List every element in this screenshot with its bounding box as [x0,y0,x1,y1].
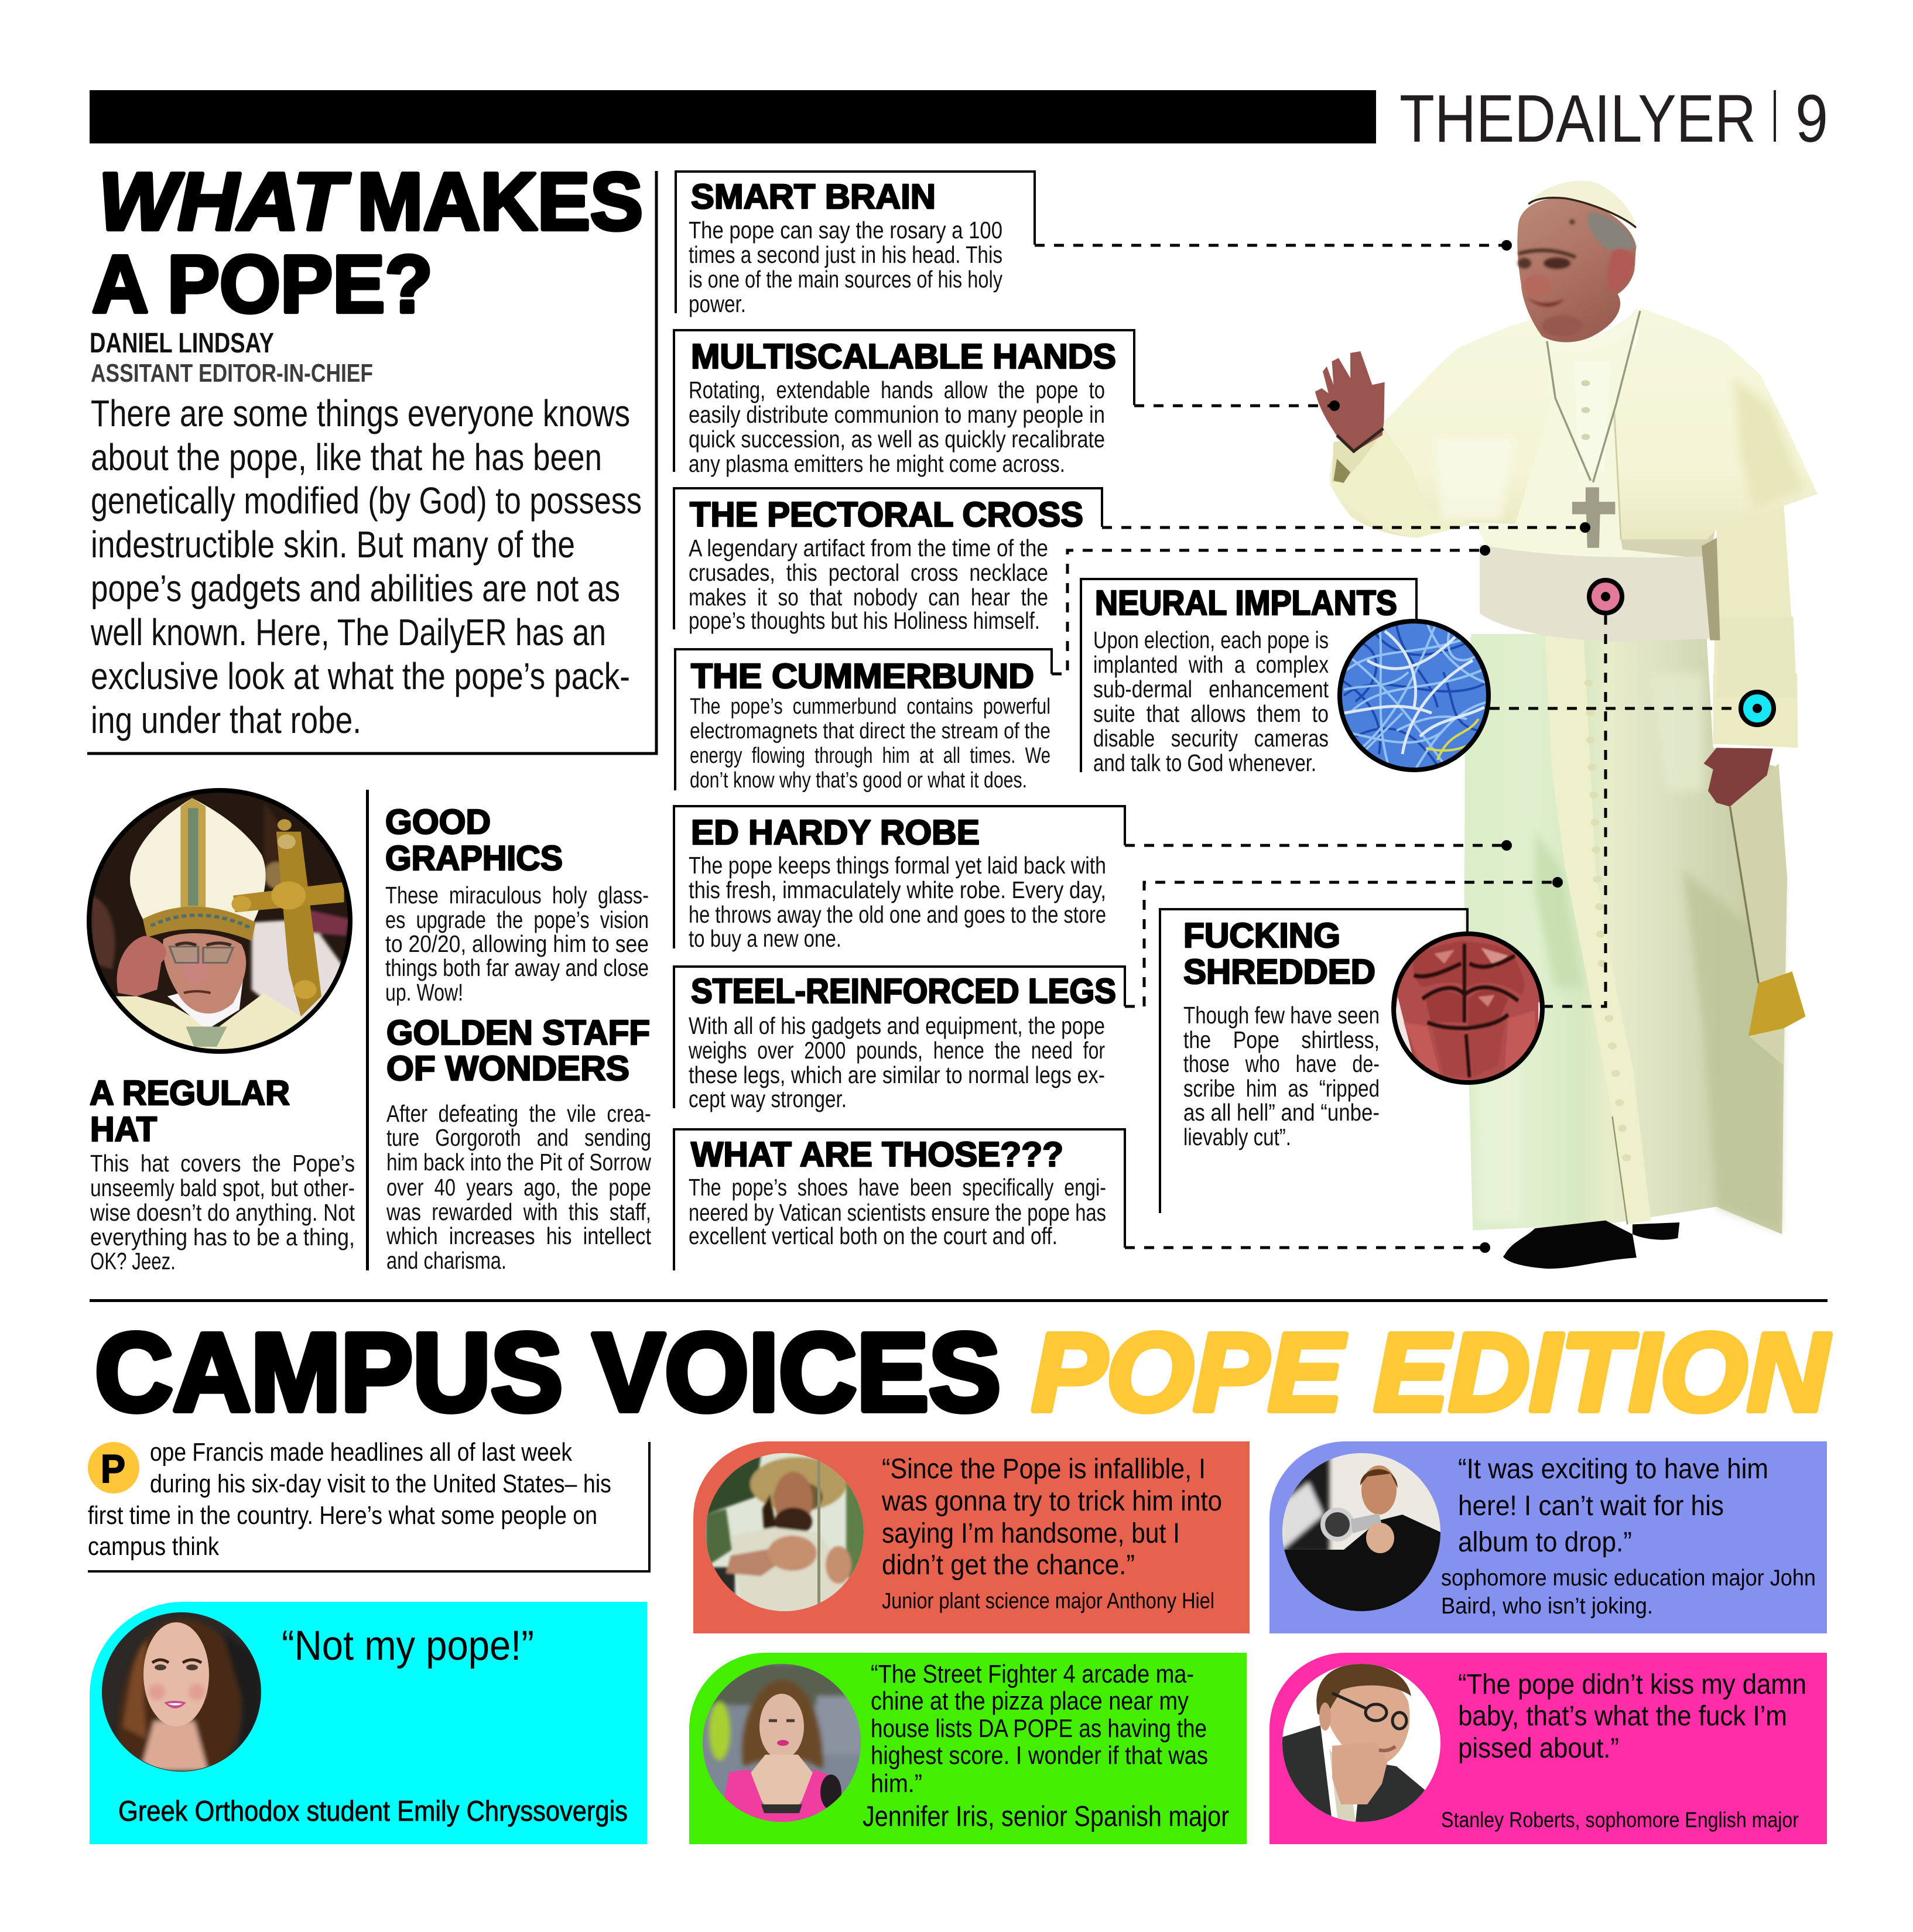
sidebar: a regular hat: This hat covers the Pope’s [90,1150,355,1177]
sidebar: a regular hat: HAT [90,1110,157,1149]
quote card: anthony: Junior plant science major Anthony Hiel [882,1589,1214,1614]
quote card: john [1269,1441,1827,1633]
campus voices heading [95,1311,1830,1434]
panel: fucking shredded: lievably cut”. [1183,1123,1291,1150]
sidebar: a regular hat [90,1074,355,1275]
panel: what are those: WHAT ARE THOSE??? [691,1135,1063,1174]
sidebar: good graphics [385,803,649,1006]
icon: pink target marker [1589,580,1622,613]
quote card: jennifer: him.” [871,1769,922,1798]
masthead: THEDAILYER [1399,81,1756,156]
intro paragraph [90,392,642,741]
panel: what are those [674,1129,1125,1270]
quote card: stanley: pissed about.” [1458,1733,1619,1764]
quote card: jennifer: house lists DA POPE as having the [871,1714,1207,1743]
intro paragraph: genetically modified (by God) to possess [91,479,642,522]
panel: fucking shredded [1160,909,1467,1213]
panel: fucking shredded: the Pope shirtless, [1183,1026,1380,1053]
panel: the cummerbund [675,649,1052,793]
panel: multiscalable hands: Rotating, extendable hands allow the pope to [689,376,1105,403]
quote card: john: Baird, who isn’t joking. [1441,1594,1653,1619]
intro paragraph: well known. Here, The DailyER has an [90,611,606,653]
panel: neural implants: NEURAL IMPLANTS [1095,584,1397,622]
sidebar: good graphics: es upgrade the pope’s vision [385,906,649,933]
panel: neural implants: Upon election, each pope is [1093,626,1329,653]
sidebar: a regular hat: everything has to be a thing, [90,1224,355,1251]
campus voices intro: first time in the country. Here’s what some people on [88,1501,597,1530]
quote card: stanley [1269,1653,1827,1844]
sidebar: golden staff: which increases his intellect [386,1222,652,1249]
quote card: stanley: “The pope didn’t kiss my damn [1458,1669,1806,1700]
sidebar: golden staff: GOLDEN STAFF [386,1013,650,1052]
sidebar: a regular hat: OK? Jeez. [90,1248,176,1275]
panel: what are those: excellent vertical both on the court and off. [689,1222,1058,1249]
sidebar: golden staff: After defeating the vile crea- [386,1100,651,1127]
intro paragraph: There are some things everyone knows [91,392,630,434]
title: MAKES [357,156,643,247]
byline: ASSITANT EDITOR-IN-CHIEF [91,359,373,388]
panel: smart brain: SMART BRAIN [691,177,936,216]
quote card: jennifer: chine at the pizza place near my [871,1687,1189,1715]
quote card: emily [90,1602,647,1844]
panel: neural implants: and talk to God whenever. [1093,749,1316,776]
photo: abs [1392,932,1544,1084]
quote card: jennifer: highest score. I wonder if that was [871,1741,1208,1770]
callout connectors [1035,240,1757,1253]
panel: multiscalable hands: any plasma emitters he might come across. [689,450,1065,477]
panel: fucking shredded: FUCKING [1183,916,1340,955]
panel: neural implants: sub-dermal enhancement [1093,676,1329,703]
intro paragraph: pope’s gadgets and abilities are not as [91,567,620,609]
panel: neural implants [1081,579,1416,776]
intro paragraph: ing under that robe. [91,699,361,741]
panel: smart brain: The pope can say the rosary a 100 [689,217,1002,244]
panel: ed hardy robe: The pope keeps things formal yet laid back with [689,852,1106,879]
photo: pope with mitre and staff [83,785,358,1057]
panel: steel-reinforced legs: these legs, which are similar to normal legs ex- [689,1061,1105,1088]
panel: the cummerbund: The pope’s cummerbund contains powerful [690,694,1050,719]
sidebar: a regular hat: wise doesn’t do anything. Not [90,1199,355,1226]
panel: the cummerbund: electromagnets that direct the stream of the [690,719,1050,744]
panel: the cummerbund: don’t know why that’s good or what it does. [690,768,1027,793]
panel: the pectoral cross [674,488,1102,634]
panel: ed hardy robe: to buy a new one. [689,925,841,952]
panel: the pectoral cross: makes it so that nobody can hear the [689,584,1048,611]
sidebar: golden staff: ture Gorgoroth and sending [386,1124,651,1151]
sidebar: good graphics: things both far away and close [385,954,649,981]
panel: steel-reinforced legs: weighs over 2000 pounds, hence the need for [688,1037,1105,1064]
byline: DANIEL LINDSAY [90,328,274,359]
sidebar: good graphics: These miraculous holy glass- [385,882,649,909]
sidebar: good graphics: up. Wow! [385,979,463,1006]
panel: fucking shredded: scribe him as “ripped [1183,1075,1380,1102]
campus voices heading: CAMPUS VOICES [95,1311,1001,1434]
panel: fucking shredded: those who have de- [1183,1050,1380,1077]
panel: steel-reinforced legs: With all of his gadgets and equipment, the pope [689,1012,1105,1039]
panel: multiscalable hands: quick succession, as well as quickly recalibrate [689,426,1105,453]
panel: fucking shredded: as all hell” and “unbe- [1183,1099,1380,1126]
sidebar: golden staff: OF WONDERS [386,1049,629,1088]
panel: ed hardy robe: ED HARDY ROBE [691,813,980,852]
sidebar: golden staff: over 40 years ago, the pope [386,1174,651,1201]
sidebar: golden staff: him back into the Pit of Sorrow [386,1149,651,1176]
pope figure [1315,181,1818,1269]
quote card: emily: Greek Orthodox student Emily Chryssovergis [118,1796,628,1827]
title: WHAT [98,156,350,247]
masthead: 9 [1795,81,1828,156]
intro paragraph: indestructible skin. But many of the [91,523,575,566]
panel: smart brain: power. [689,290,746,317]
panel: multiscalable hands [674,330,1134,477]
sidebar: a regular hat: unseemly bald spot, but other- [90,1174,355,1201]
panel: fucking shredded: SHREDDED [1183,953,1375,991]
panel: smart brain: is one of the main sources of his holy [689,266,1002,293]
quote card: anthony [693,1441,1250,1633]
panel: steel-reinforced legs: cept way stronger. [689,1085,847,1112]
icon: cyan target marker [1741,692,1774,725]
campus voices intro: P [101,1447,125,1491]
panel: smart brain: times a second just in his head. This [689,241,1002,268]
campus voices heading: POPE EDITION [1032,1311,1830,1434]
panel: neural implants: suite that allows them to [1093,700,1329,727]
quote card: emily: “Not my pope!” [282,1623,534,1669]
panel: the cummerbund: THE CUMMERBUND [691,657,1034,696]
sidebar: a regular hat: A REGULAR [90,1074,290,1112]
panel: the cummerbund: energy flowing through him at all times. We [690,744,1050,768]
panel: smart brain [676,172,1035,317]
panel: the pectoral cross: A legendary artifact from the time of the [689,535,1048,561]
section rule [90,1299,1828,1302]
quote card: john: “It was exciting to have him [1458,1454,1768,1485]
panel: ed hardy robe: this fresh, immaculately white robe. Every day, [689,876,1106,903]
sidebar: good graphics: GRAPHICS [385,839,563,878]
title [92,156,643,330]
panel: what are those: neered by Vatican scientists ensure the pope has [689,1199,1106,1226]
sidebar: golden staff: was rewarded with this staff, [386,1198,651,1225]
panel: the pectoral cross: crusades, this pectoral cross necklace [689,559,1048,586]
quote card: stanley: baby, that’s what the fuck I’m [1458,1701,1787,1732]
quote card: jennifer: “The Street Fighter 4 arcade ma- [871,1660,1194,1688]
sidebar: good graphics: to 20/20, allowing him to see [385,930,649,957]
panel: steel-reinforced legs: STEEL-REINFORCED LEGS [691,972,1116,1010]
panel: steel-reinforced legs [674,967,1125,1112]
header bar [90,90,1376,143]
panel: multiscalable hands: MULTISCALABLE HANDS [691,337,1116,376]
intro paragraph: exclusive look at what the pope’s pack- [91,655,630,697]
quote card: anthony: didn’t get the chance.” [882,1550,1135,1581]
panel: ed hardy robe [674,806,1125,952]
panel: ed hardy robe: he throws away the old one and goes to the store [689,901,1106,928]
quote card: john: sophomore music education major John [1441,1566,1816,1591]
quote card: anthony: was gonna try to trick him into [881,1486,1222,1517]
panel: multiscalable hands: easily distribute communion to many people in [689,401,1105,428]
quote card: anthony: saying I’m handsome, but I [882,1518,1180,1549]
panel: the pectoral cross: pope’s thoughts but his Holiness himself. [689,607,1040,634]
panel: the pectoral cross: THE PECTORAL CROSS [690,495,1083,534]
quote card: stanley: Stanley Roberts, sophomore English major [1441,1808,1799,1832]
sidebar: good graphics: GOOD [385,803,491,841]
byline [90,328,373,388]
panel: neural implants: disable security cameras [1093,725,1329,752]
quote card: jennifer [689,1653,1247,1844]
panel: neural implants: implanted with a complex [1093,651,1329,678]
quote card: anthony: “Since the Pope is infallible, I [882,1454,1206,1485]
photo: blue wires [1338,619,1490,772]
campus voices intro [88,1438,649,1571]
intro paragraph: about the pope, like that he has been [91,436,602,478]
sidebar: golden staff [386,1013,652,1274]
quote card: john: album to drop.” [1458,1527,1632,1558]
title: A POPE? [92,239,433,330]
panel: what are those: The pope’s shoes have been specifically engi- [689,1174,1106,1201]
panel: fucking shredded: Though few have seen [1183,1002,1380,1029]
campus voices intro: campus think [88,1532,220,1561]
campus voices intro: during his six-day visit to the United States– his [150,1469,611,1498]
quote card: jennifer: Jennifer Iris, senior Spanish major [863,1801,1229,1832]
sidebar: golden staff: and charisma. [386,1247,507,1274]
quote card: john: here! I can’t wait for his [1458,1491,1724,1522]
campus voices intro: ope Francis made headlines all of last week [150,1438,573,1467]
